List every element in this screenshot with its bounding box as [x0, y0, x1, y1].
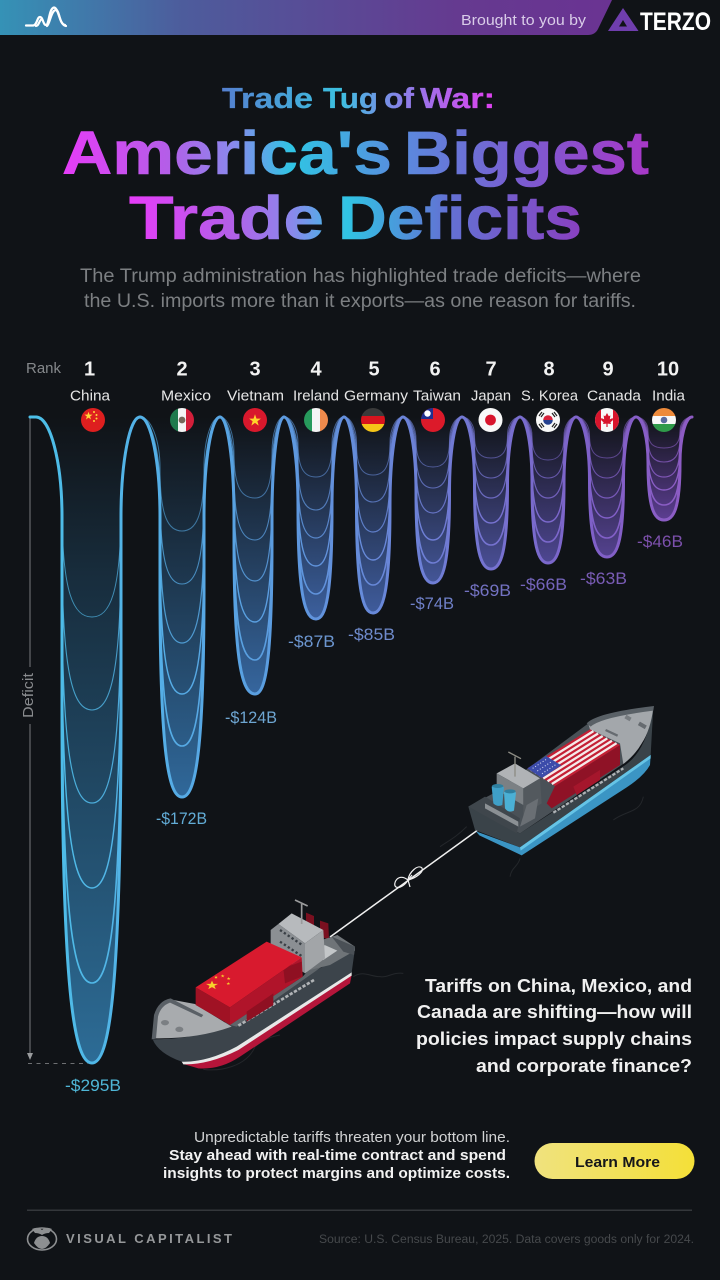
- flag: Mexico: [170, 408, 194, 432]
- subtitle: [80, 266, 641, 312]
- headline line 2: [129, 184, 582, 252]
- deck rail: [553, 768, 623, 813]
- deficit axis: [21, 417, 88, 1064]
- rank numbers: 1: [84, 358, 95, 380]
- country names: Taiwan: [413, 388, 461, 404]
- Terzo logo: [608, 8, 711, 36]
- rank numbers: 8: [543, 358, 555, 380]
- subtitle: The Trump administration has highlighted trade deficits—where: [80, 266, 641, 287]
- country names: Mexico: [161, 388, 211, 404]
- call to action text: Stay ahead with real-time contract and spend: [169, 1148, 506, 1164]
- rank label: Rank: [26, 361, 62, 377]
- flag: Taiwan: [421, 408, 445, 432]
- blue waterline: [476, 755, 651, 855]
- valley: Taiwan: [403, 417, 462, 583]
- rank numbers: 4: [310, 358, 322, 380]
- callout: policies impact supply chains: [416, 1028, 692, 1049]
- country names: Ireland: [293, 388, 339, 404]
- value labels: -$63B: [580, 569, 627, 588]
- deck rail: [238, 980, 314, 1026]
- rank numbers: [84, 358, 679, 380]
- kicker: Trade Tug of War: Trade: [222, 83, 313, 115]
- button: Learn More: Learn More: [575, 1154, 660, 1171]
- kicker: Trade Tug of War: Tug: [323, 83, 378, 115]
- kicker: Trade Tug of War: War:: [420, 83, 495, 115]
- hull: [468, 707, 653, 847]
- chart: trade deficit valleys: [30, 417, 692, 1063]
- country names: S. Korea: [521, 388, 579, 404]
- call to action text: insights to protect margins and optimize costs.: [163, 1166, 510, 1182]
- mid deck: [230, 952, 343, 1027]
- value labels: -$85B: [348, 625, 395, 644]
- flag: Japan: [478, 408, 502, 432]
- headline line 2: Deficits: [338, 184, 582, 252]
- country names: Canada: [587, 388, 642, 404]
- headline line 2: Trade: [129, 184, 324, 252]
- container flag top: [527, 729, 620, 786]
- headline line 1: Biggest: [404, 119, 649, 187]
- country names: Japan: [471, 388, 511, 404]
- valley: Vietnam: [220, 417, 284, 694]
- valley: China: [36, 417, 140, 1063]
- callout: Tariffs on China, Mexico, and: [425, 975, 692, 996]
- callout: [416, 975, 692, 1076]
- illustration: China cargo ship: [152, 900, 403, 1070]
- flag: Canada: [595, 408, 619, 432]
- flag: Germany: [361, 408, 385, 432]
- water ripples: [440, 797, 643, 877]
- value labels: -$172B: [156, 809, 207, 828]
- valley: South Korea: [520, 417, 576, 563]
- subtitle: the U.S. imports more than it exports—as one reason for tariffs.: [84, 291, 636, 312]
- flag canton: [527, 756, 561, 778]
- value labels: -$295B: [65, 1076, 121, 1095]
- tow rope with knot: [330, 819, 493, 937]
- top banner: [0, 0, 711, 36]
- Visual Capitalist logo: [28, 1228, 232, 1250]
- kicker: Trade Tug of War: [222, 83, 495, 115]
- value labels: [65, 532, 683, 1095]
- flag: India: [652, 408, 676, 432]
- valley: Canada: [576, 417, 636, 557]
- country names: Vietnam: [227, 388, 284, 404]
- bow deck: [153, 999, 232, 1038]
- water ripples: [203, 973, 403, 1070]
- valley: India: [636, 417, 692, 520]
- bridge: [271, 900, 325, 973]
- country names: Germany: [344, 388, 409, 404]
- wordmark: VISUAL CAPITALIST: [66, 1231, 232, 1246]
- rank numbers: 7: [485, 358, 497, 380]
- red hull bottom: [183, 975, 352, 1069]
- bow deck: [588, 707, 653, 764]
- headline line 1: America's: [62, 119, 392, 187]
- callout: Canada are shifting—how will: [417, 1001, 692, 1022]
- title: [62, 83, 649, 252]
- containers: [196, 942, 303, 1025]
- flag: Vietnam: [243, 408, 267, 432]
- hull: [153, 948, 355, 1062]
- value labels: -$46B: [637, 532, 683, 551]
- valley: Mexico: [140, 417, 220, 797]
- blue funnels: [492, 785, 504, 806]
- flag: South Korea: [536, 408, 560, 432]
- white stripe: [182, 972, 352, 1064]
- country names: India: [652, 388, 686, 404]
- flag stars: [206, 974, 231, 989]
- icon: wave logo: [26, 8, 66, 26]
- kicker: Trade Tug of War: of: [384, 83, 415, 115]
- flags: [81, 408, 676, 432]
- button: Learn More: [534, 1143, 694, 1179]
- red funnels: [306, 913, 329, 939]
- value labels: -$74B: [410, 594, 454, 613]
- valley: Ireland: [284, 417, 344, 619]
- callout: and corporate finance?: [476, 1055, 692, 1076]
- flag: Ireland: [304, 408, 328, 432]
- rank numbers: 6: [429, 358, 441, 380]
- source note: Source: U.S. Census Bureau, 2025. Data covers goods only for 2024.: [319, 1234, 694, 1246]
- country names: [70, 388, 686, 404]
- rank numbers: 10: [657, 358, 679, 380]
- valley: Germany: [344, 417, 403, 613]
- country names: China: [70, 388, 111, 404]
- rank numbers: 3: [249, 358, 261, 380]
- illustration: US cargo ship: [440, 706, 654, 877]
- container side: [547, 745, 620, 808]
- value labels: -$66B: [520, 575, 567, 594]
- axis label: Deficit: [21, 673, 37, 718]
- flag: China: [81, 408, 105, 432]
- superstructure: [468, 752, 542, 833]
- value labels: -$124B: [225, 708, 277, 727]
- sponsor text: Brought to you by: [461, 13, 587, 29]
- value labels: -$87B: [288, 632, 335, 651]
- icon: VC mark: [28, 1228, 56, 1250]
- flag stripes: [530, 731, 617, 784]
- value labels: -$69B: [464, 581, 511, 600]
- headline line 1: [62, 119, 649, 187]
- call to action text: [163, 1130, 510, 1182]
- valley: Japan: [462, 417, 520, 569]
- rank numbers: 5: [368, 358, 380, 380]
- deck: [468, 707, 653, 833]
- stern: [310, 935, 355, 970]
- call to action text: Unpredictable tariffs threaten your bottom line.: [194, 1130, 510, 1146]
- footer divider: [27, 1210, 692, 1211]
- rank numbers: 9: [602, 358, 614, 380]
- rank numbers: 2: [176, 358, 188, 380]
